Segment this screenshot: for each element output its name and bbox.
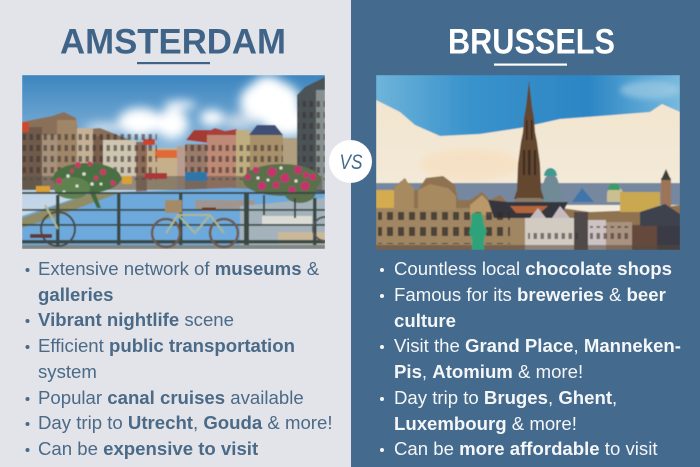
- bullet list: Amsterdam: system: [38, 361, 97, 382]
- bullet list: Brussels: [380, 258, 681, 459]
- bullet list: Brussels: Countless local chocolate shops: [394, 258, 672, 279]
- town hall tower: [514, 80, 544, 199]
- statue: [469, 213, 487, 250]
- canal water: [22, 188, 325, 249]
- buildings: [22, 112, 129, 141]
- photo: Amsterdam canal: [22, 75, 337, 249]
- heading: Amsterdam: AMSTERDAM: [60, 22, 286, 62]
- bullet list: Brussels: Can be more affordable to visit: [394, 438, 658, 459]
- heading underline: [494, 64, 567, 66]
- bullet list: Amsterdam: galleries: [38, 284, 113, 305]
- distant skyline: [376, 183, 680, 205]
- bullet list: Amsterdam: Day trip to Utrecht, Gouda & more!: [38, 412, 332, 433]
- quay with cars and awnings: [22, 176, 322, 190]
- bullet list: Amsterdam: Vibrant nightlife scene: [38, 309, 234, 330]
- bullet list: Amsterdam: [26, 258, 332, 459]
- bullet list: Brussels: Pis, Atomium & more!: [394, 361, 583, 382]
- bullet list: Brussels: culture: [394, 310, 456, 331]
- flower box left: [53, 162, 121, 208]
- VS badge: VS: [340, 151, 362, 174]
- railing: [22, 192, 325, 245]
- bullet list: Amsterdam: Extensive network of museums &: [38, 258, 320, 279]
- bicycles: [30, 205, 337, 247]
- bullet list: Amsterdam: Can be expensive to visit: [38, 438, 258, 459]
- bullet list: Amsterdam: Popular canal cruises available: [38, 387, 304, 408]
- bullet list: Brussels: Visit the Grand Place, Manneken-: [394, 335, 681, 356]
- panel: Amsterdam: [22, 28, 331, 459]
- panel: Brussels: [351, 0, 700, 467]
- bullet list: Brussels: Day trip to Bruges, Ghent,: [394, 387, 617, 408]
- bullet list: Brussels: Famous for its breweries & beer: [394, 284, 666, 305]
- row of guild houses: [392, 176, 680, 226]
- heading underline: [137, 62, 210, 64]
- heading: Brussels: BRUSSELS: [448, 22, 615, 62]
- bullet list: Brussels: Luxembourg & more!: [394, 413, 577, 434]
- VS badge: [329, 140, 372, 183]
- flower box right: [243, 164, 321, 203]
- photo: Brussels skyline: [376, 75, 680, 250]
- bullet list: Amsterdam: Efficient public transportation: [38, 335, 295, 356]
